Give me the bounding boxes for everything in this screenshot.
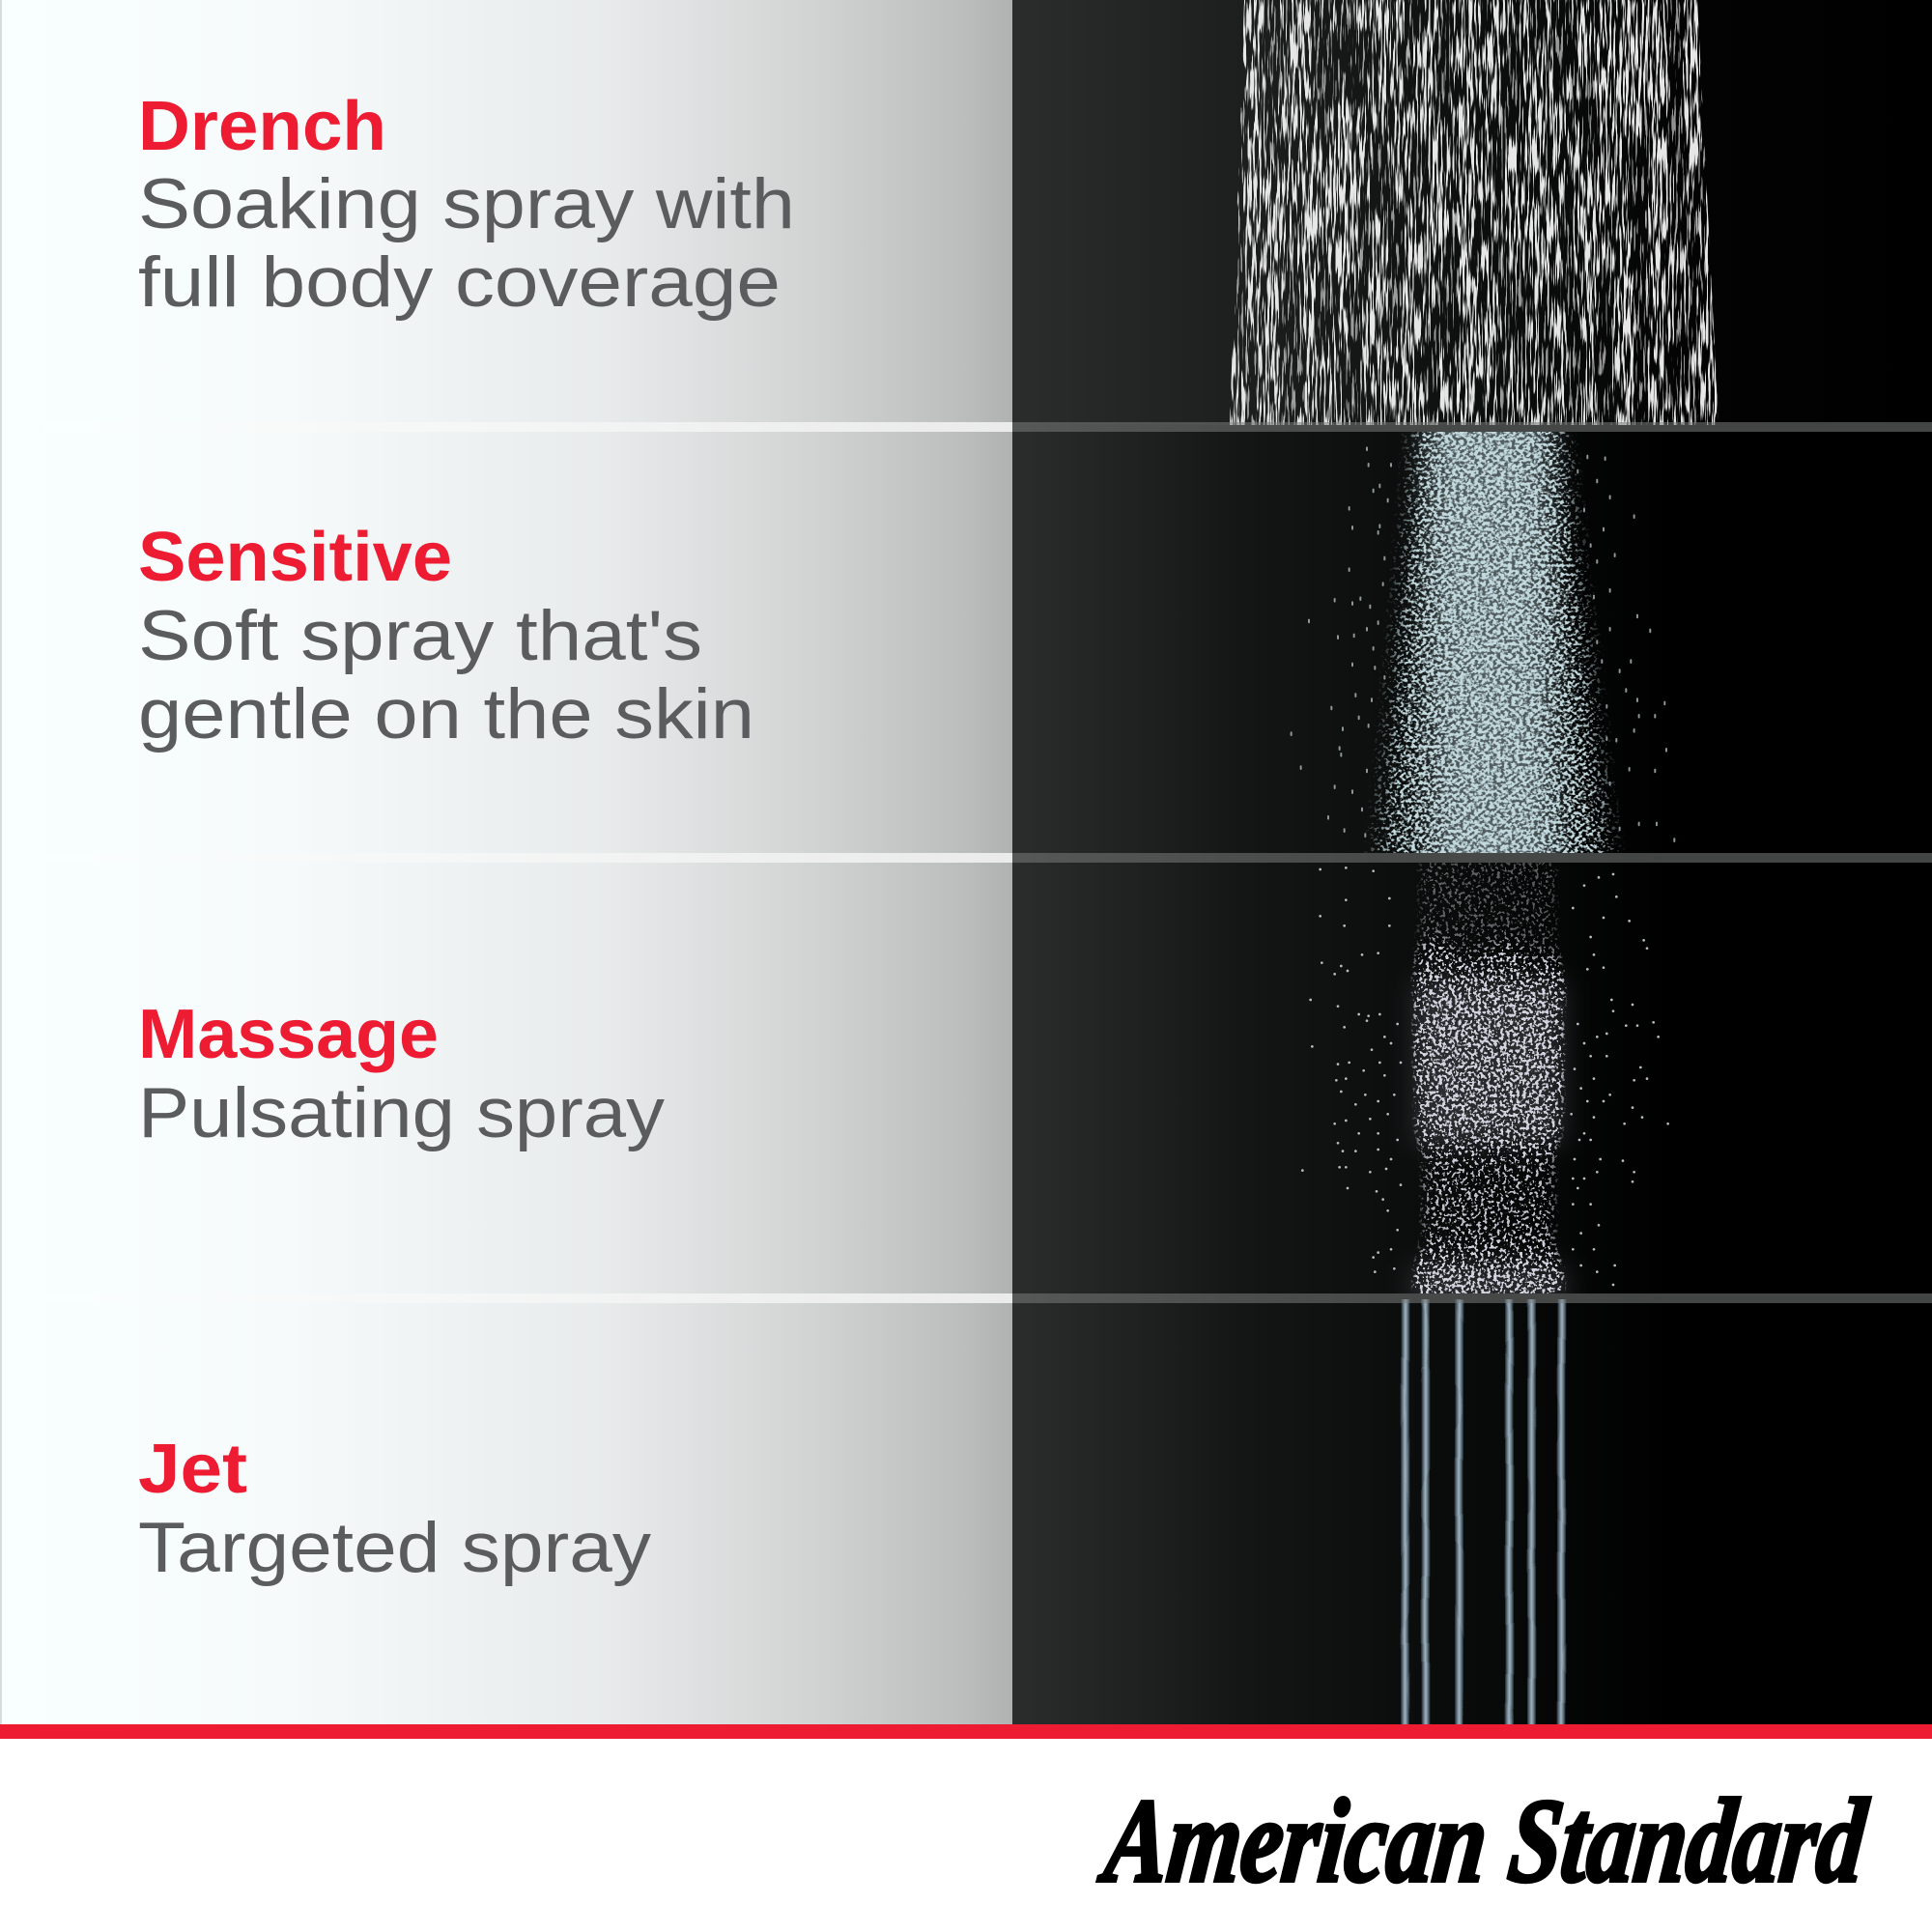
row: drench xyxy=(138,0,1719,425)
description: Soft spray that's gentle on the skin: Soft spray that's xyxy=(138,597,702,675)
description: Soaking spray with full body coverage: full body coverage xyxy=(138,243,781,322)
water spray: massage droplets xyxy=(1302,840,1668,1309)
panel: left gradient background xyxy=(0,0,1012,1724)
water spray: sensitive mist xyxy=(1291,432,1675,853)
description: Soft spray that's gentle on the skin xyxy=(138,597,754,753)
water spray: six jet streams xyxy=(1401,1299,1566,1726)
description: Pulsating spray: Pulsating spray xyxy=(138,1074,666,1152)
panel: right dark background xyxy=(1012,0,1932,1724)
title: Sensitive: Sensitive xyxy=(138,519,452,596)
row: sensitive xyxy=(140,432,1675,853)
description: Soft spray that's gentle on the skin: gentle on the skin xyxy=(138,675,754,753)
title: Jet: Jet xyxy=(138,1431,247,1508)
water spray: drench streaks xyxy=(1230,0,1719,425)
description: Targeted spray: Targeted spray xyxy=(138,1509,652,1587)
red footer rule xyxy=(0,1724,1932,1739)
row: jet xyxy=(138,1299,1566,1726)
title: Massage: Massage xyxy=(138,996,439,1073)
row: massage xyxy=(138,840,1668,1309)
title: Drench: Drench xyxy=(138,88,386,165)
description: Soaking spray with full body coverage: Soaking spray with xyxy=(138,165,795,243)
description: Soaking spray with full body coverage xyxy=(138,165,795,322)
